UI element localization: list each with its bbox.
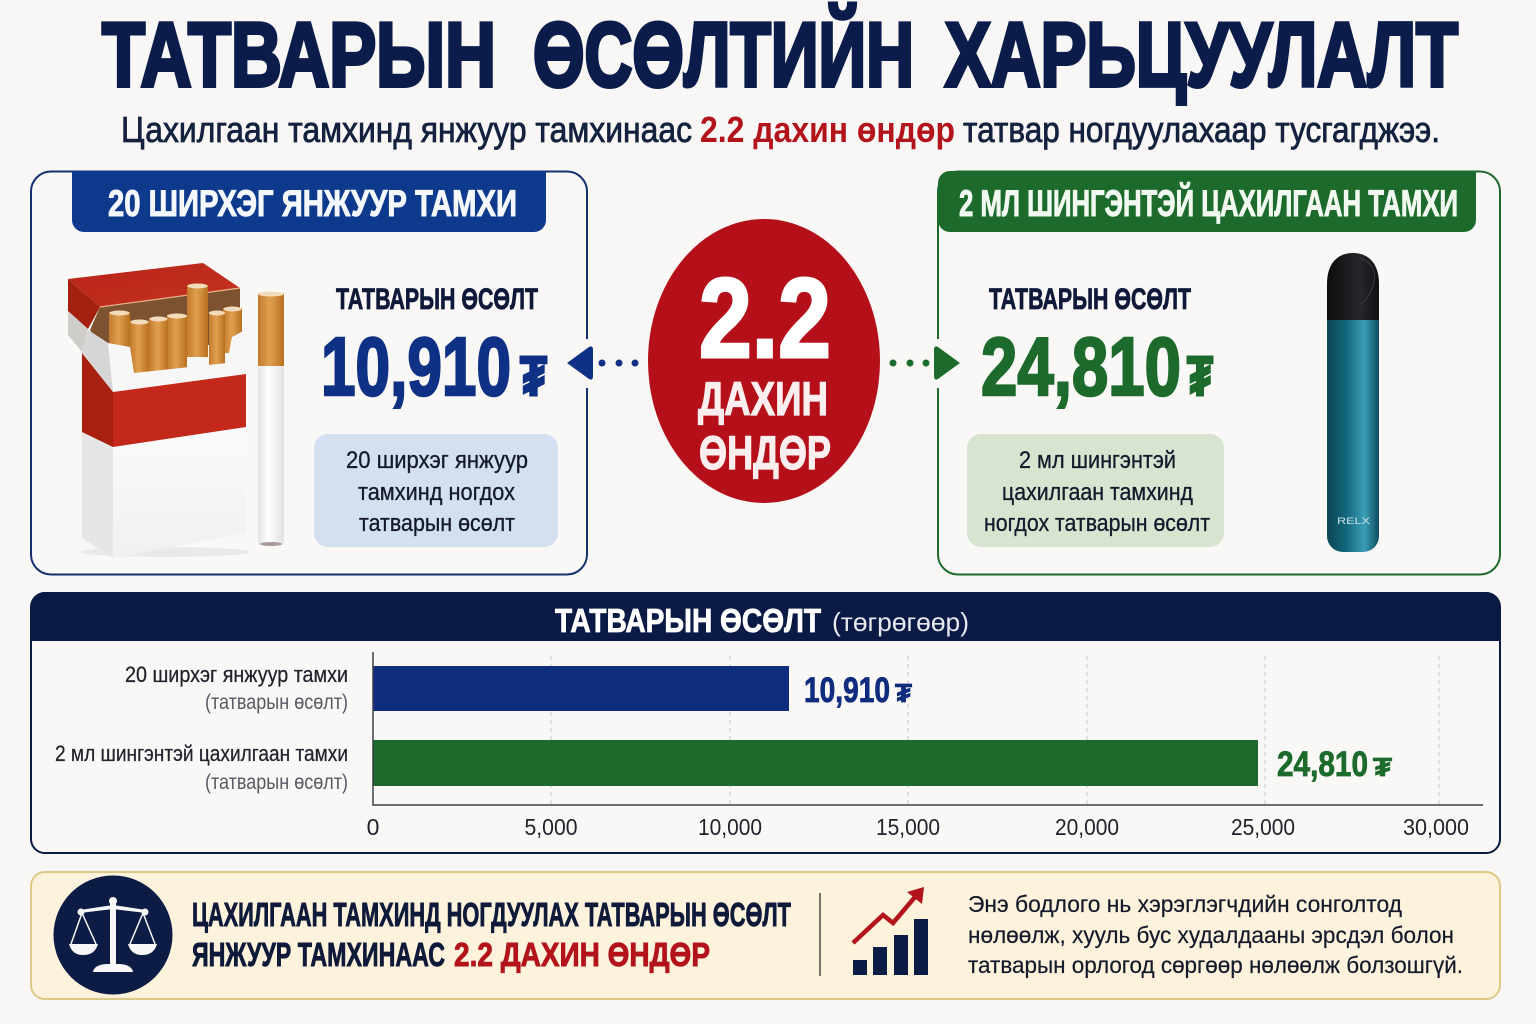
bar: cigarettes	[373, 666, 789, 711]
category label: e-cigarette: 2 мл шингэнтэй цахилгаан тамхи	[55, 741, 348, 766]
x axis labels	[367, 814, 1469, 840]
bar label: e-cigarette: ₮	[1373, 752, 1392, 782]
headline	[192, 896, 791, 973]
category label: cigarettes: (татварын өсөлт)	[205, 691, 348, 714]
panel: bar chart	[31, 592, 1500, 853]
subtitle: Цахилгаан тамхинд янжуур тамхинаас	[121, 109, 692, 150]
bar label: cigarettes: 10,910	[804, 671, 890, 710]
description: татварын орлогод сөргөөр нөлөөлж болзошгүй.	[968, 952, 1463, 978]
note box: e-cigarette: цахилгаан тамхинд	[1002, 479, 1193, 506]
chart header	[31, 592, 1500, 641]
title	[102, 3, 1458, 106]
category label: e-cigarette: (татварын өсөлт)	[205, 771, 348, 794]
subtitle	[121, 109, 1440, 150]
note box: cigarettes: татварын өсөлт	[359, 510, 515, 537]
badge: 2.2 times higher: ДАХИН	[698, 372, 828, 425]
x axis labels: 0	[367, 814, 379, 840]
badge: 2.2 times higher: 2.2	[699, 255, 831, 381]
x axis labels: 25,000	[1231, 814, 1295, 840]
bar label: cigarettes: ₮	[895, 678, 912, 708]
note box: e-cigarette	[967, 434, 1224, 547]
icon: vape device	[1327, 253, 1379, 552]
subtitle: 2.2 дахин өндөр	[700, 109, 955, 150]
note box: e-cigarette: 2 мл шингэнтэй	[1019, 447, 1176, 474]
panel: conclusion	[31, 872, 1500, 999]
panel header: cigarettes: 20 ШИРХЭГ ЯНЖУУР ТАМХИ	[108, 183, 517, 224]
panel: cigarettes	[31, 171, 591, 574]
note box: cigarettes: тамхинд ногдох	[358, 479, 515, 506]
panel header: cigarettes	[72, 171, 546, 232]
badge: 2.2 times higher: ӨНДӨР	[699, 426, 831, 479]
badge: 2.2 times higher	[648, 219, 880, 503]
x axis labels: 20,000	[1055, 814, 1119, 840]
label: tax increase: ТАТВАРЫН ӨСӨЛТ	[989, 283, 1191, 316]
arrow: left	[567, 346, 638, 380]
bar label: e-cigarette: 24,810	[1277, 745, 1368, 784]
label: tax increase: ТАТВАРЫН ӨСӨЛТ	[336, 283, 538, 316]
headline: ЯНЖУУР ТАМХИНААС	[192, 936, 445, 973]
x axis labels: 10,000	[698, 814, 762, 840]
value: 10,910: 10,910	[321, 320, 511, 413]
icon: single cigarette	[258, 292, 284, 546]
note box: e-cigarette: ногдох татварын өсөлт	[984, 510, 1210, 537]
x axis labels: 15,000	[876, 814, 940, 840]
panel: e-cigarette	[934, 171, 1500, 574]
description: Энэ бодлого нь хэрэглэгчдийн сонголтод	[968, 891, 1403, 917]
icon: scales	[54, 876, 172, 994]
chart header: ТАТВАРЫН ӨСӨЛТ	[555, 602, 821, 639]
bar: e-cigarette	[373, 740, 1258, 786]
category label: cigarettes	[125, 662, 348, 714]
icon: cigarette pack	[68, 263, 250, 558]
chart header: (төгрөгөөр)	[832, 607, 969, 637]
headline: ЦАХИЛГААН ТАМХИНД НОГДУУЛАХ ТАТВАРЫН ӨСӨЛТ	[192, 896, 791, 933]
icon: vape device: RELX	[1337, 516, 1370, 526]
description	[968, 891, 1463, 978]
panel header: e-cigarette	[938, 171, 1476, 232]
subtitle: татвар ногдуулахаар тусгагджээ.	[963, 109, 1440, 150]
value: 24,810: ₮	[1187, 344, 1213, 407]
icon: rising chart	[853, 887, 928, 975]
headline: 2.2 ДАХИН ӨНДӨР	[454, 936, 710, 973]
x axis labels: 5,000	[524, 814, 578, 840]
title: ӨСӨЛТИЙН	[533, 3, 914, 106]
value: 10,910: ₮	[520, 344, 547, 407]
description: нөлөөлж, хууль бус худалдааны эрсдэл болон	[968, 922, 1454, 948]
arrow: right	[890, 346, 960, 380]
note box: cigarettes: 20 ширхэг янжуур	[346, 447, 528, 474]
value: 24,810: 24,810	[981, 320, 1181, 413]
title: ТАТВАРЫН	[102, 5, 496, 106]
note box: cigarettes	[314, 434, 558, 547]
category label: cigarettes: 20 ширхэг янжуур тамхи	[125, 662, 348, 687]
category label: e-cigarette	[55, 741, 348, 794]
x axis labels: 30,000	[1403, 814, 1469, 840]
